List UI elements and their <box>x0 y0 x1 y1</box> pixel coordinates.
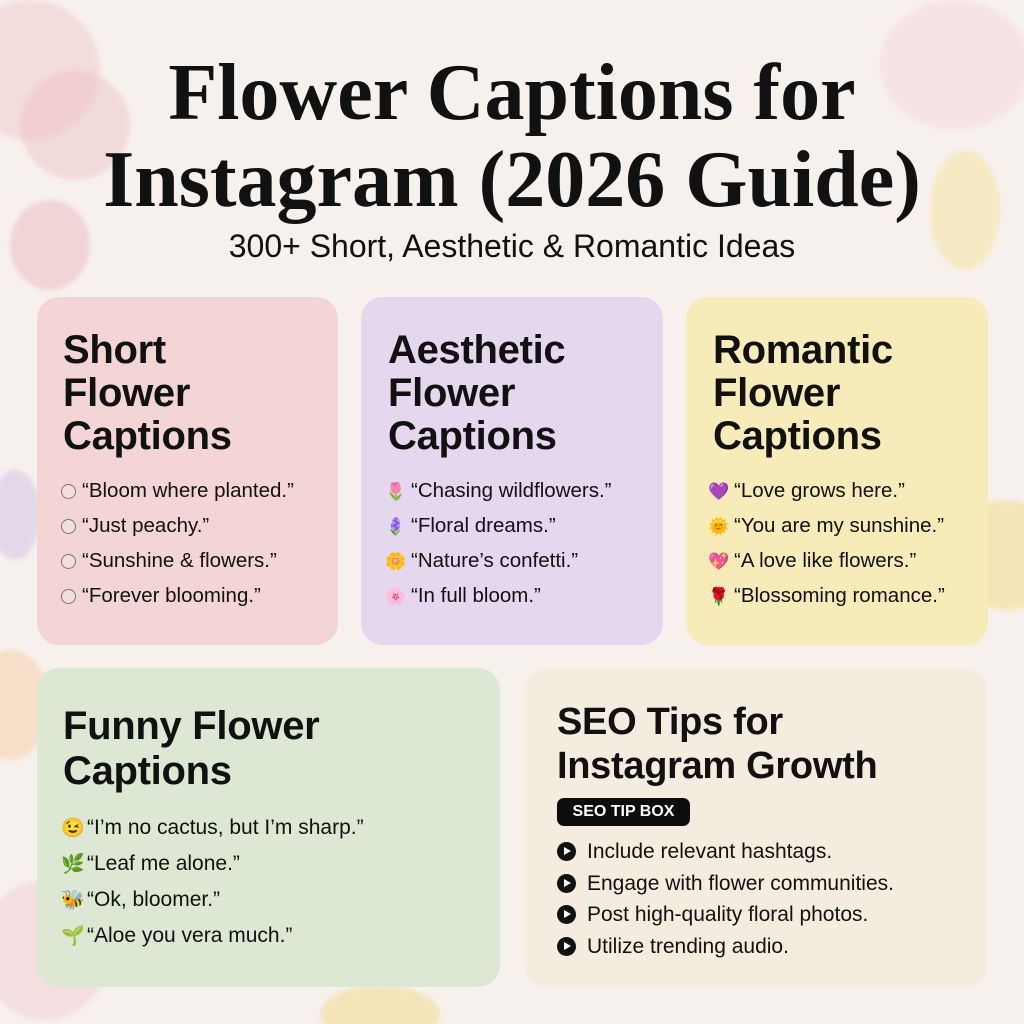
heading: romantic: Captions <box>713 414 882 458</box>
list: short <box>61 479 294 607</box>
badge: SEO tip box <box>557 798 690 826</box>
list: aesthetic: “Floral dreams.” <box>411 514 556 537</box>
heading: aesthetic <box>388 328 565 458</box>
heading: aesthetic: Aesthetic <box>388 328 565 372</box>
list: short: “Forever blooming.” <box>82 584 261 607</box>
panel: funny captions <box>37 668 500 987</box>
list: aesthetic: 🌷 <box>385 482 407 501</box>
list: funny: “Aloe you vera much.” <box>87 924 292 947</box>
list: romantic: 🌹 <box>708 587 730 606</box>
heading: short: Flower <box>63 371 190 415</box>
list: funny: 🐝 <box>61 890 85 911</box>
heading: funny <box>63 704 320 793</box>
list: short: “Just peachy.” <box>82 514 209 537</box>
list: short: “Sunshine & flowers.” <box>82 549 277 572</box>
panel: romantic captions <box>686 297 988 645</box>
list: aesthetic: “Chasing wildflowers.” <box>411 479 612 502</box>
list: aesthetic: 🌸 <box>385 587 407 606</box>
list: SEO tips <box>557 840 894 958</box>
list: aesthetic <box>385 479 612 607</box>
list: funny: “Leaf me alone.” <box>87 852 240 875</box>
list: romantic: 💜 <box>708 482 730 501</box>
list: funny: 🌿 <box>61 854 85 875</box>
list: aesthetic: 🪻 <box>385 517 407 536</box>
badge: SEO tip box: SEO TIP BOX <box>573 803 674 820</box>
list: funny: 🌱 <box>61 926 85 947</box>
list: funny: “Ok, bloomer.” <box>87 888 220 911</box>
list: SEO tips: Utilize trending audio. <box>587 934 789 958</box>
list: romantic: “A love like flowers.” <box>734 549 916 572</box>
list: funny: 😉 <box>61 818 85 839</box>
title <box>103 49 921 224</box>
heading: short: Captions <box>63 414 232 458</box>
heading: romantic: Romantic <box>713 328 893 372</box>
list: SEO tips: Post high-quality floral photos. <box>587 903 868 926</box>
list: romantic: “Blossoming romance.” <box>734 584 945 607</box>
heading: short: Short <box>63 328 166 372</box>
list: romantic: 💖 <box>708 552 730 571</box>
list: romantic: “You are my sunshine.” <box>734 514 944 537</box>
list: romantic <box>708 479 945 607</box>
heading: romantic <box>713 328 893 458</box>
heading: SEO <box>557 701 877 787</box>
panel: SEO tips <box>524 668 987 987</box>
title: Flower Captions for <box>168 49 856 137</box>
list: funny: “I’m no cactus, but I’m sharp.” <box>87 816 364 839</box>
heading: romantic: Flower <box>713 371 840 415</box>
heading: funny: Funny Flower <box>63 704 319 748</box>
list: romantic: 🌞 <box>708 517 730 536</box>
panel: short captions <box>37 297 338 645</box>
list: funny <box>61 816 364 947</box>
title: Instagram (2026 Guide) <box>103 136 921 224</box>
heading: short <box>63 328 232 458</box>
subtitle: 300+ Short, Aesthetic & Romantic Ideas <box>229 228 795 264</box>
panel: aesthetic captions <box>361 297 663 645</box>
list: SEO tips: Engage with flower communities. <box>587 872 894 894</box>
heading: aesthetic: Captions <box>388 414 557 458</box>
heading: funny: Captions <box>63 749 232 793</box>
list: aesthetic: 🌼 <box>385 552 407 571</box>
heading: aesthetic: Flower <box>388 371 515 415</box>
list: short: “Bloom where planted.” <box>82 479 294 502</box>
list: aesthetic: “In full bloom.” <box>411 584 541 607</box>
list: SEO tips: Include relevant hashtags. <box>587 840 832 863</box>
heading: SEO: SEO Tips for <box>557 701 783 743</box>
heading: SEO: Instagram Growth <box>557 745 877 787</box>
list: aesthetic: “Nature’s confetti.” <box>411 549 578 572</box>
list: romantic: “Love grows here.” <box>734 479 905 502</box>
